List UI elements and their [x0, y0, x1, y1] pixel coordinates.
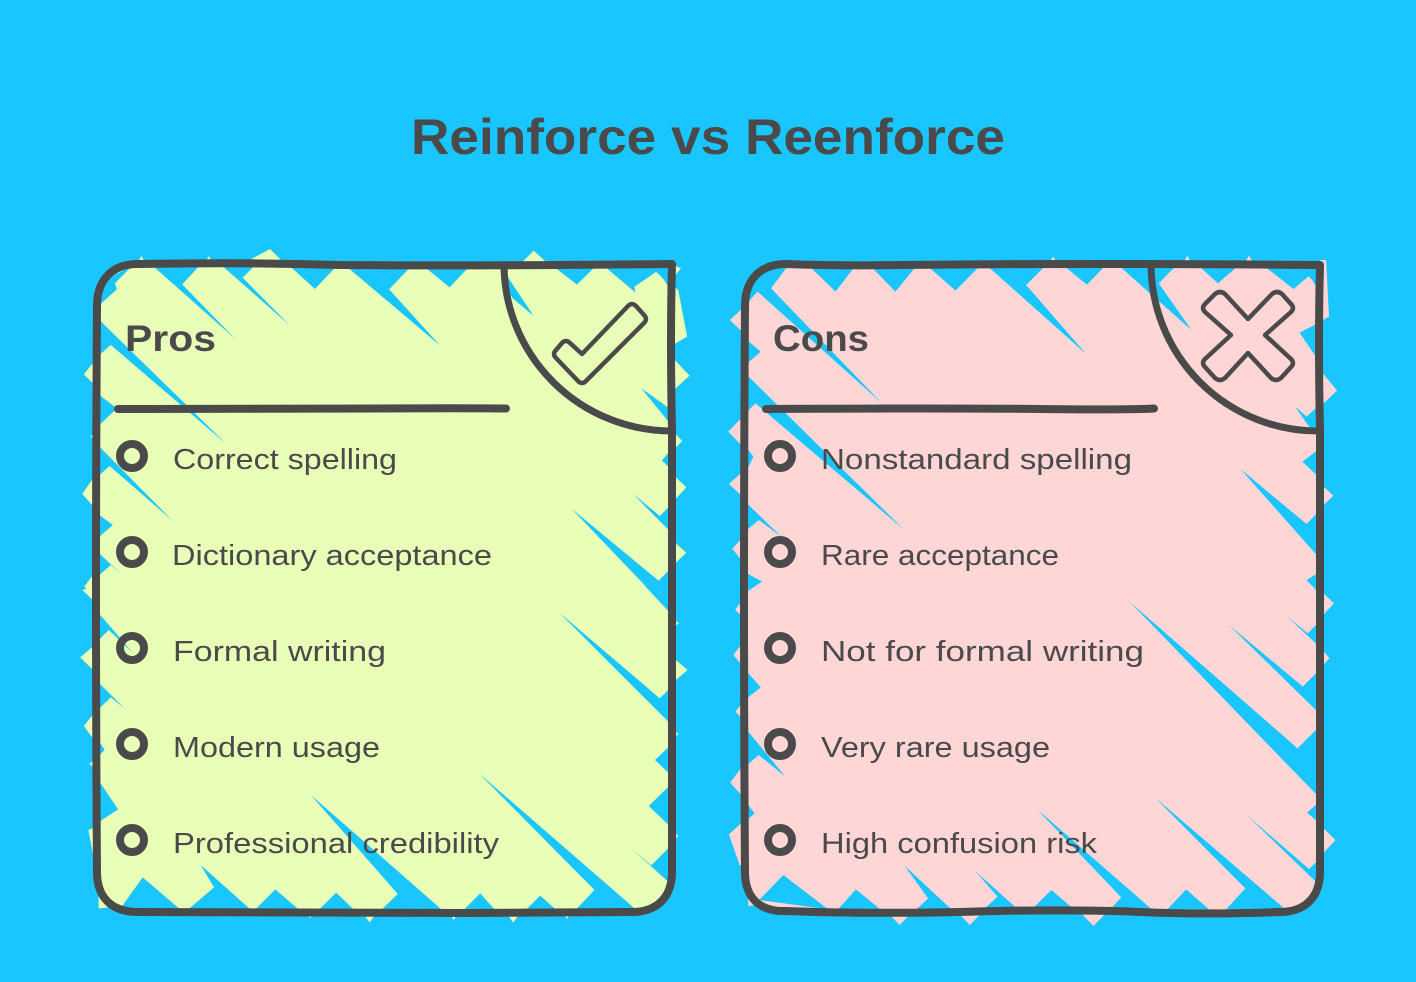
item: correct spelling: Correct spelling [173, 444, 397, 476]
panel: pros [80, 249, 690, 923]
list: pros items [120, 444, 500, 860]
panel: cons [728, 256, 1337, 926]
frame: pros [96, 263, 672, 913]
sketchy pink fill [728, 256, 1337, 926]
title: Reinforce vs Reenforce [411, 109, 1005, 165]
icon: check mark [554, 304, 646, 383]
item: formal writing [120, 636, 386, 668]
item: rare acceptance: Rare acceptance [821, 540, 1059, 572]
frame: cons [744, 264, 1320, 913]
item: formal writing: Formal writing [173, 636, 386, 668]
item: dictionary acceptance: Dictionary acceptance [172, 540, 492, 572]
heading: cons: Cons [773, 318, 869, 359]
item: very rare usage: Very rare usage [821, 732, 1050, 764]
heading: pros: Pros [125, 318, 216, 359]
item: professional credibility: Professional credibility [173, 828, 500, 860]
item: modern usage: Modern usage [173, 732, 380, 764]
sketchy yellow fill [80, 249, 690, 923]
item: not for formal writing: Not for formal writing [821, 636, 1144, 668]
item: high confusion risk: High confusion risk [821, 828, 1098, 860]
divider: cons [766, 404, 1154, 413]
item: nonstandard spelling: Nonstandard spelling [821, 444, 1132, 476]
divider: pros [118, 404, 506, 413]
list: cons items [768, 444, 1144, 860]
icon: x mark [1203, 292, 1293, 380]
corner arc: pros [504, 264, 672, 431]
corner arc: cons [1151, 264, 1318, 431]
